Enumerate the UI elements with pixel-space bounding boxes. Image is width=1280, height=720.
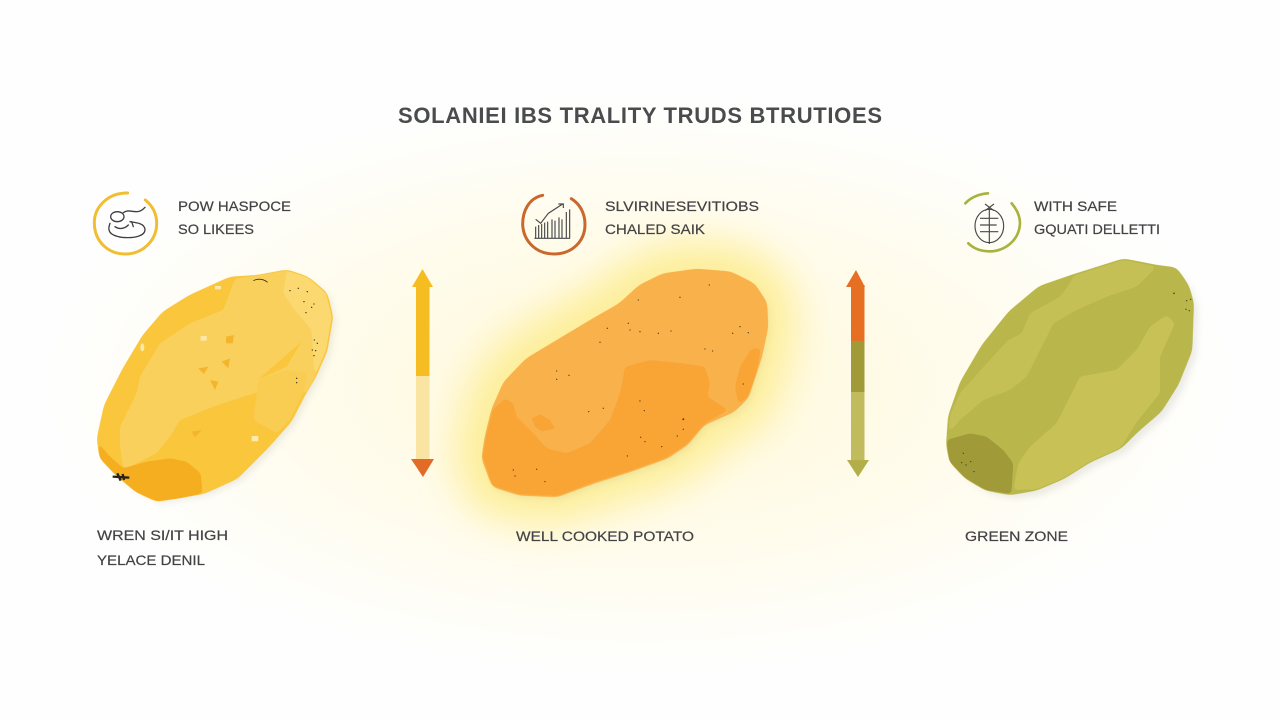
illustration: orange potato [481, 269, 768, 497]
arrow: orange to green scale [846, 270, 869, 477]
icon: orange ring with bar chart [523, 195, 585, 254]
text: orange potato heading [605, 198, 759, 237]
potato shadow [103, 276, 336, 503]
text: green potato heading: GQUATI DELLETTI [1034, 221, 1160, 237]
panel: orange potato [481, 195, 769, 499]
icon: green ring with leaf motif [965, 193, 1020, 251]
title: SOLANIEI IBS TRALITY TRUDS BTRUTIOES [398, 103, 882, 128]
caption: green potato: GREEN ZONE [965, 528, 1068, 544]
text: yellow potato heading: SO LIKEES [178, 221, 254, 237]
text: orange potato heading: CHALED SAIK [605, 221, 706, 237]
illustration: yellow potato [97, 269, 333, 502]
caption: yellow potato [97, 527, 228, 568]
illustration: green potato [946, 258, 1194, 495]
text: green potato heading: WITH SAFE [1034, 198, 1117, 214]
text: yellow potato heading [178, 198, 291, 237]
potato shadow [486, 275, 769, 499]
caption: orange potato: WELL COOKED POTATO [516, 528, 694, 544]
glow behind central potato [483, 271, 766, 495]
arrow: yellow to orange scale [411, 269, 434, 477]
potato shadow [954, 267, 1198, 499]
caption: yellow potato: WREN SI/IT HIGH [97, 527, 228, 543]
caption: yellow potato: YELACE DENIL [97, 552, 205, 568]
text: yellow potato heading: POW HASPOCE [178, 198, 291, 214]
panel: yellow potato [94, 193, 336, 503]
text: green potato heading [1034, 198, 1160, 237]
text: orange potato heading: SLVIRINESEVITIOBS [605, 198, 759, 214]
panel: green potato [946, 193, 1198, 499]
icon: yellow ring with potato sketch [94, 193, 157, 254]
